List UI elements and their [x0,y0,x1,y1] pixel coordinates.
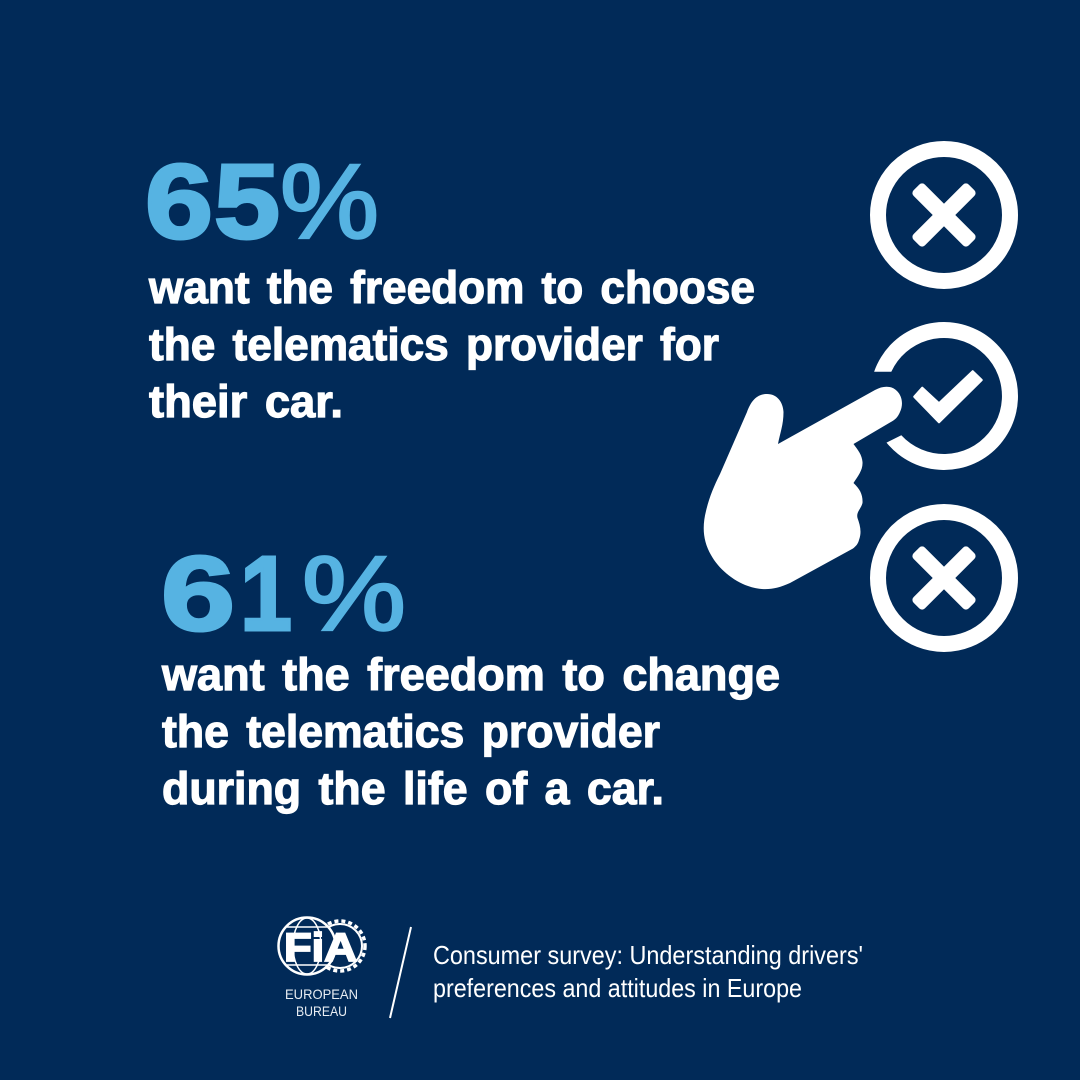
text block: 61% description [161,649,780,814]
logo text: European Bureau: BUREAU [296,1003,347,1019]
icon: cross in circle, top [878,149,1010,281]
source text: Consumer survey: Understanding drivers' [433,940,863,970]
statistic block: 61% [161,535,780,814]
heading: 61%: % [302,535,406,653]
icon: cross in circle, bottom [878,512,1010,644]
heading: 61%: 1 [240,535,292,653]
text block: 65% description: their car. [149,376,343,427]
heading: 61%: 6 [161,535,235,653]
icon: pointing hand [704,387,902,589]
logo text: European Bureau [285,986,358,1019]
heading: 65%: 5 [214,143,280,261]
text block: 61% description: want the freedom to change [161,649,780,700]
heading: 61% [161,535,406,653]
text block: 65% description: the telematics provider for [149,319,719,370]
source text [433,940,863,1003]
logo: FIA European Bureau [278,918,365,1019]
text block: 61% description: the telematics provider [162,706,660,757]
text block: 65% description: want the freedom to choose [148,262,755,313]
statistic block: 65% [145,143,755,427]
text block: 65% description [148,262,755,427]
heading: 65% [145,143,379,261]
icon: check in open circle [874,322,1018,470]
logo text: European Bureau: EUROPEAN [285,986,358,1002]
source text: preferences and attitudes in Europe [433,973,802,1003]
heading: 65%: 6 [145,143,213,261]
heading: 65%: % [280,143,379,261]
logo mark: globe and gear: FiA [284,926,357,970]
text block: 61% description: during the life of a car. [162,763,664,814]
